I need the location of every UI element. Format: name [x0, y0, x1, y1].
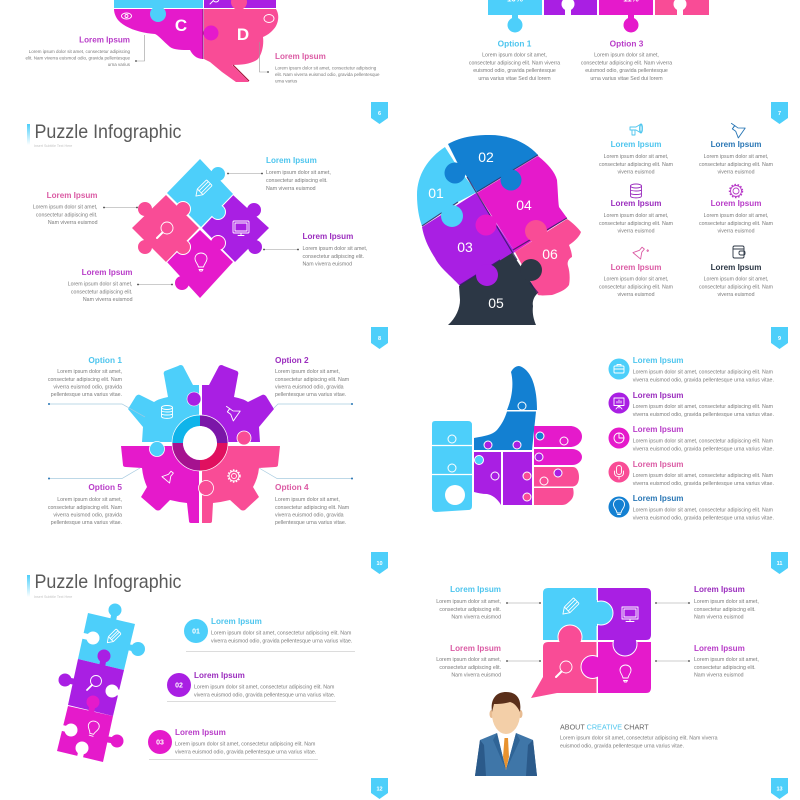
gear quarter: pink [202, 446, 280, 523]
brain puzzle graphic [114, 0, 278, 82]
item: database purple: Lorem Ipsum [611, 199, 661, 208]
icon: monitor [622, 607, 638, 622]
piece 06 body [515, 219, 581, 295]
item: flask pink: viverra euismod [617, 292, 655, 298]
callout top right: Lorem Ipsum [694, 585, 745, 594]
piece: cyan body [543, 588, 596, 640]
item: flask pink: consectetur adipiscing elit. Nam [599, 284, 674, 290]
connector tabs [474, 402, 568, 501]
numbers: 06 [542, 246, 558, 262]
option 1 callout: pellentesque urna varius vitae. [51, 392, 122, 398]
icon: pencil [560, 598, 579, 617]
page badge 6: 6 [378, 111, 381, 117]
list item 1 [608, 356, 774, 384]
callout magenta: consectetur adipiscing elit. [71, 290, 132, 296]
heading slide 8: Insert Subtitle Text Here [34, 144, 72, 148]
list item 4: Lorem Ipsum [633, 460, 684, 469]
list item 1: Lorem ipsum dolor sit amet, consectetur adipiscing elit. Nam [633, 370, 774, 376]
item: megaphone cyan: Lorem ipsum dolor sit amet, [604, 154, 668, 160]
person illustration [475, 692, 537, 776]
option 1: Option 1 [498, 38, 532, 48]
number badge 03 [148, 730, 172, 754]
callout purple: Lorem ipsum dolor sit amet, [302, 246, 367, 252]
list item 4 [608, 460, 774, 487]
callout pink [33, 191, 138, 226]
item: wallet dark: Lorem ipsum dolor sit amet, [704, 276, 768, 282]
piece 05 body [448, 253, 538, 325]
list item 3: Lorem ipsum dolor sit amet, consectetur adipiscing elit. Nam [633, 438, 774, 444]
page badge 11: 11 [777, 561, 782, 567]
callout purple [263, 232, 367, 268]
item: megaphone cyan: viverra euismod [617, 170, 655, 176]
item: speaker blue: Lorem ipsum dolor sit amet, [704, 154, 768, 160]
number badge 01 [184, 619, 208, 643]
piece: bulb magenta [167, 230, 233, 298]
page badge 13: 13 [776, 786, 783, 792]
callout C: Lorem Ipsum [79, 36, 130, 44]
gear quarter: cyan [128, 365, 199, 442]
item 03: Lorem Ipsum [175, 728, 226, 737]
callout pink: Lorem ipsum dolor sit amet, [33, 204, 98, 210]
callout top left: consectetur adipiscing elit. [439, 607, 501, 613]
option 1: consectetur adipiscing elit. Nam viverra [469, 60, 560, 66]
callout top right: Lorem ipsum dolor sit amet, [694, 599, 759, 605]
callout D: Lorem Ipsum [275, 52, 326, 61]
list item 2: Lorem Ipsum [633, 391, 684, 400]
piece 03 body [422, 193, 515, 286]
callout D [260, 42, 380, 84]
callout C: urna varius [108, 62, 131, 67]
gear icon: flask [162, 469, 176, 483]
list item 1: Lorem Ipsum [633, 356, 684, 365]
item: gear magenta [699, 184, 774, 234]
list item 1: viverra euismod odio, gravida pellentesque urna varius vitae. [633, 378, 774, 384]
page badge 10 [371, 552, 388, 574]
about text block: euismod odio, gravida pellentesque urna varius vitae. [560, 744, 684, 750]
puzzle tabs [441, 162, 550, 286]
item: flask pink [599, 244, 674, 298]
page badge 9: 9 [778, 336, 781, 342]
callout magenta: Lorem ipsum dolor sit amet, [68, 282, 132, 288]
icon: database [630, 184, 642, 198]
item: database purple: viverra euismod [617, 228, 655, 234]
icon: bulb [620, 665, 631, 682]
callout bottom right [655, 644, 759, 678]
list item 5: viverra euismod odio, gravida pellentesque urna varius vitae. [633, 516, 774, 522]
numbers: 03 [457, 239, 473, 255]
gear tab: purple [187, 392, 201, 406]
option 4 callout: Lorem ipsum dolor sit amet, [275, 497, 340, 503]
palm blocks [474, 452, 532, 505]
option 3: euismod odio, gravida pellentesque [585, 68, 668, 74]
page badge 13 [771, 778, 788, 799]
item 01 [184, 617, 355, 652]
option 5 callout: Option 5 [88, 482, 122, 492]
option 4 callout: pellentesque urna varius vitae. [275, 520, 346, 526]
callout bottom left: Lorem Ipsum [450, 644, 501, 653]
icon: pie chart [608, 428, 630, 448]
puzzle strip graphic [488, 0, 709, 32]
fingers [534, 426, 582, 505]
tab: magenta [581, 654, 607, 680]
gear quarter: purple [202, 365, 274, 442]
piece: monitor purple [202, 195, 269, 262]
gear icon: database [162, 406, 172, 418]
slide 8: diamond puzzle [27, 121, 388, 349]
item: gear magenta: viverra euismod [717, 228, 755, 234]
slide 7: puzzle strip [469, 0, 788, 124]
icon: megaphone [630, 124, 642, 135]
item: megaphone cyan: consectetur adipiscing elit. Nam [599, 162, 674, 168]
icon: top cropped magnifier [210, 0, 219, 4]
item: wallet dark: Lorem Ipsum [711, 263, 761, 272]
page badge 11 [771, 552, 788, 574]
callout top left: Nam viverra euismod [451, 614, 501, 620]
list item 5: Lorem ipsum dolor sit amet, consectetur adipiscing elit. Nam [633, 508, 774, 514]
gear tab: cyan [150, 442, 164, 456]
letter D: D [237, 25, 249, 44]
slide 10: gear puzzle [48, 355, 388, 574]
option 5 callout: consectetur adipiscing elit. Nam [48, 505, 123, 511]
about text block: Lorem ipsum dolor sit amet, consectetur adipiscing elit. Nam viverra [560, 736, 718, 742]
callout bottom right: consectetur adipiscing elit. [694, 665, 756, 671]
icon: microphone [608, 462, 630, 482]
callout pink: Lorem Ipsum [47, 191, 98, 200]
item: database purple [599, 184, 674, 234]
option 4 callout: Option 4 [275, 482, 309, 492]
callout top left [436, 585, 541, 620]
callout pink: Nam viverra euismod [48, 220, 98, 226]
item 03: viverra euismod odio, gravida pellentesque urna varius vitae. [175, 750, 316, 756]
icon: speech bubble [264, 14, 274, 22]
number badge 02: 02 [175, 682, 183, 690]
icon: wallet [733, 246, 745, 258]
item: speaker blue: viverra euismod [717, 170, 755, 176]
piece: magenta bulb [57, 696, 124, 762]
item: flask pink: Lorem Ipsum [611, 263, 661, 272]
page badge 12 [371, 778, 388, 799]
option 5 callout: viverra euismod odio, gravida [53, 512, 122, 518]
number badge 02 [167, 673, 191, 697]
stacked puzzle graphic [57, 604, 145, 762]
callout top right [655, 585, 759, 620]
option 4 callout: consectetur adipiscing elit. Nam [275, 505, 350, 511]
icon: eye [122, 13, 132, 19]
heading slide 8: Puzzle Infographic [34, 121, 182, 143]
item: database purple: consectetur adipiscing elit. Nam [599, 221, 674, 227]
numbers: 01 [428, 185, 444, 201]
callout cyan: consectetur adipiscing elit. [266, 178, 328, 184]
option 1 callout [48, 355, 145, 417]
callout D: urna varius [275, 78, 298, 84]
callout top left: Lorem Ipsum [450, 585, 501, 594]
page badge 12: 12 [376, 786, 383, 792]
slide 9: head puzzle [417, 120, 788, 349]
option 2 callout: viverra euismod odio, gravida [275, 384, 344, 390]
tab: cyan [586, 600, 613, 626]
option 1: urna varius vitae Sed dui lorem [478, 76, 551, 82]
list item 2 [608, 391, 774, 418]
page badge 7 [771, 102, 788, 124]
option 3: consectetur adipiscing elit. Nam viverra [581, 60, 672, 66]
piece: pink speech-bubble body [531, 642, 596, 698]
option 3: Option 3 [610, 38, 644, 48]
list item 3: Lorem Ipsum [633, 425, 684, 434]
option 5 callout: Lorem ipsum dolor sit amet, [57, 497, 122, 503]
heading slide 12: Puzzle Infographic [34, 571, 182, 593]
option 2 callout: Lorem ipsum dolor sit amet, [275, 369, 340, 375]
callout cyan: Nam viverra euismod [266, 186, 316, 192]
letter C: C [175, 16, 187, 35]
callout bottom right: Nam viverra euismod [694, 672, 744, 678]
square puzzle graphic [531, 588, 651, 698]
piece: purple body [598, 588, 651, 640]
option 1 callout: Option 1 [88, 355, 122, 365]
callout cyan: Lorem Ipsum [266, 156, 317, 165]
icon: speaker [727, 120, 745, 138]
heading slide 12: Insert Subtitle Text Here [34, 595, 72, 599]
item: wallet dark: consectetur adipiscing elit. Nam [699, 284, 774, 290]
icon: briefcase [608, 358, 630, 380]
page badge 8 [371, 327, 388, 349]
item 02: Lorem Ipsum [194, 671, 245, 680]
option 3: urna varius vitae Sed dui lorem [590, 76, 663, 82]
page badge 6 [371, 102, 388, 124]
callout cyan [227, 156, 331, 192]
callout top left: Lorem ipsum dolor sit amet, [436, 599, 501, 605]
number badge 03: 03 [156, 740, 164, 746]
icon: magnifier [556, 661, 572, 677]
item 01: Lorem Ipsum [211, 617, 262, 626]
slide 12: stacked puzzle [27, 571, 388, 799]
icon: flask [633, 244, 649, 259]
option 1 [469, 38, 560, 82]
callout cyan: Lorem ipsum dolor sit amet, [266, 170, 331, 176]
item 01: Lorem ipsum dolor sit amet, consectetur adipiscing elit. Nam [211, 630, 352, 636]
option 1: euismod odio, gravida pellentesque [473, 68, 556, 74]
piece: pencil cyan [167, 159, 233, 227]
numbers: 04 [516, 197, 532, 213]
page badge 8: 8 [378, 336, 381, 342]
callout purple: Lorem Ipsum [302, 232, 353, 241]
numbers: 02 [478, 149, 494, 165]
item: megaphone cyan [599, 124, 674, 176]
callout bottom left: Nam viverra euismod [451, 672, 501, 678]
thumbs up graphic [432, 366, 582, 512]
item 01: viverra euismod odio, gravida pellentesque urna varius vitae. [211, 638, 352, 644]
item: speaker blue: Lorem Ipsum [711, 140, 761, 149]
option 4 callout [259, 468, 353, 526]
item 02 [167, 671, 336, 702]
callout C: elit. Nam viverra euismod odio, gravida pellentesque [25, 56, 130, 60]
gear tab: pink bottom [198, 480, 214, 496]
callout bottom left [436, 644, 541, 678]
piece: cyan pencil [78, 604, 145, 670]
icon: presentation board [608, 392, 630, 414]
piece 04 body [477, 156, 567, 252]
option 1 callout: viverra euismod odio, gravida [53, 384, 122, 390]
callout C [25, 35, 144, 67]
callout D: elit. Nam viverra euismod odio, gravida pellentesque [275, 72, 380, 77]
callout magenta [68, 268, 173, 303]
item 03: Lorem ipsum dolor sit amet, consectetur adipiscing elit. Nam [175, 742, 316, 748]
item: wallet dark [699, 246, 774, 298]
gear puzzle graphic [121, 365, 280, 523]
item 02: viverra euismod odio, gravida pellentesque urna varius vitae. [194, 692, 335, 698]
item: wallet dark: viverra euismod [717, 292, 755, 298]
list item 5: Lorem Ipsum [633, 494, 684, 503]
callout bottom right: Lorem ipsum dolor sit amet, [694, 657, 759, 663]
piece: magenta body [598, 642, 651, 693]
gear icon: gear [228, 470, 240, 482]
item: speaker blue [699, 120, 774, 176]
gear tab: pink top [237, 431, 251, 445]
gear icon: speaker [222, 403, 240, 421]
cuff [432, 421, 472, 512]
callout magenta: Nam viverra euismod [83, 297, 133, 303]
numbers: 05 [488, 295, 504, 311]
page badge 9 [771, 327, 788, 349]
option 5 callout [48, 468, 140, 526]
icon: bulb [608, 496, 630, 518]
about text block: ABOUT CREATIVE CHART [560, 722, 649, 732]
option 1: Lorem ipsum dolor sit amet, [482, 52, 547, 58]
item: flask pink: Lorem ipsum dolor sit amet, [604, 276, 668, 282]
item: megaphone cyan: Lorem Ipsum [611, 140, 661, 149]
number badge 01: 01 [192, 628, 200, 636]
slide 13: rounded square puzzle with person [436, 585, 788, 799]
callout bottom left: consectetur adipiscing elit. [439, 665, 501, 671]
callout C: Lorem ipsum dolor sit amet, consectetur adipiscing [29, 49, 130, 54]
option 2 callout [274, 355, 353, 408]
list item 3 [608, 425, 774, 452]
list item 2: Lorem ipsum dolor sit amet, consectetur adipiscing elit. Nam [633, 404, 774, 410]
tab: pink [557, 625, 583, 650]
slide 11: thumbs up puzzle [432, 356, 788, 574]
option 2 callout: consectetur adipiscing elit. Nam [275, 377, 350, 383]
list item 3: viverra euismod odio, gravida pellentesque urna varius vitae. [633, 446, 774, 452]
option 3 [581, 38, 672, 82]
tab: purple [612, 631, 638, 656]
thumb [474, 366, 537, 450]
head puzzle graphic [417, 135, 581, 325]
item: gear magenta: consectetur adipiscing elit. Nam [699, 221, 774, 227]
callout top right: consectetur adipiscing elit. [694, 607, 756, 613]
item: gear magenta: Lorem ipsum dolor sit amet, [704, 213, 768, 219]
numbers [428, 149, 558, 311]
piece 01 body [417, 147, 477, 226]
list item 4: Lorem ipsum dolor sit amet, consectetur adipiscing elit. Nam [633, 473, 774, 479]
gear quarter: magenta [121, 446, 199, 523]
callout pink: consectetur adipiscing elit. [36, 212, 98, 218]
callout bottom right: Lorem Ipsum [694, 644, 745, 653]
item: gear magenta: Lorem Ipsum [711, 199, 761, 208]
piece: purple magnifier [58, 650, 124, 716]
item: speaker blue: consectetur adipiscing elit. Nam [699, 162, 774, 168]
option 1 callout: consectetur adipiscing elit. Nam [48, 377, 123, 383]
item 02: Lorem ipsum dolor sit amet, consectetur adipiscing elit. Nam [194, 684, 335, 690]
piece 02 body [448, 135, 538, 192]
piece: magnifier pink [132, 195, 199, 262]
page badge 10: 10 [376, 561, 383, 567]
option 3: Lorem ipsum dolor sit amet, [594, 52, 659, 58]
centre ring [172, 415, 228, 471]
icon: gear [730, 184, 742, 198]
about text block [560, 722, 718, 750]
option 1 callout: Lorem ipsum dolor sit amet, [57, 369, 122, 375]
callout magenta: Lorem Ipsum [82, 268, 132, 277]
callout top right: Nam viverra euismod [694, 614, 744, 620]
slide 6: brain puzzle [25, 0, 388, 124]
callout purple: Nam viverra euismod [302, 262, 352, 268]
option 2 callout: pellentesque urna varius vitae. [275, 392, 346, 398]
option 4 callout: viverra euismod odio, gravida [275, 512, 344, 518]
callout D: Lorem ipsum dolor sit amet, consectetur adipiscing [275, 66, 377, 70]
callout bottom left: Lorem ipsum dolor sit amet, [436, 657, 501, 663]
option 5 callout: pellentesque urna varius vitae. [51, 520, 122, 526]
page badge 7: 7 [778, 111, 781, 117]
list item 4: viverra euismod odio, gravida pellentesque urna varius vitae. [633, 481, 774, 487]
list item 5 [608, 494, 774, 522]
callout purple: consectetur adipiscing elit. [302, 254, 364, 260]
option 2 callout: Option 2 [275, 355, 309, 365]
list item 2: viverra euismod odio, gravida pellentesque urna varius vitae. [633, 412, 774, 418]
item 03 [148, 728, 318, 760]
item: database purple: Lorem ipsum dolor sit amet, [604, 213, 668, 219]
diamond puzzle graphic [132, 159, 269, 298]
